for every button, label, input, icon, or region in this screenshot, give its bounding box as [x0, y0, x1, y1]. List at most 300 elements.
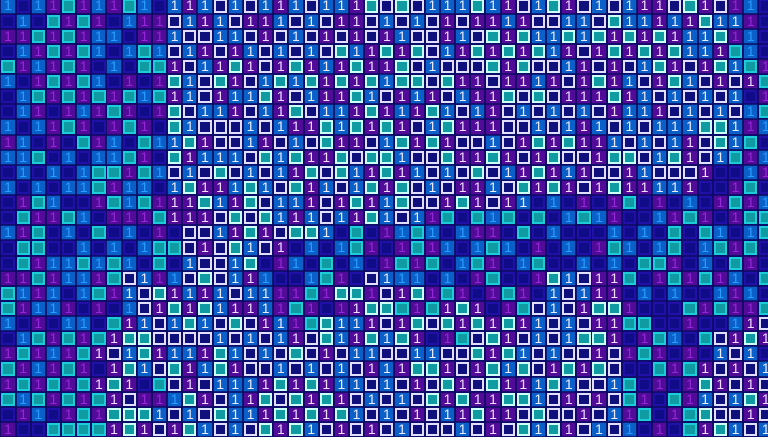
- binary digit grid: 1: [338, 209, 345, 225]
- binary digit grid: 1: [201, 179, 209, 195]
- binary digit grid: 1: [504, 194, 512, 210]
- binary digit grid: 1: [186, 43, 194, 59]
- binary digit grid: 1: [535, 330, 542, 346]
- binary digit grid: 1: [19, 13, 27, 29]
- binary digit grid: 1: [186, 13, 194, 29]
- binary digit grid: 1: [398, 43, 406, 59]
- binary digit grid: 1: [504, 58, 512, 74]
- binary digit grid: 1: [428, 285, 436, 301]
- binary digit grid: 1: [610, 224, 618, 240]
- binary digit grid: 1: [625, 179, 633, 195]
- binary digit grid: 1: [292, 315, 300, 331]
- binary digit grid: 1: [140, 421, 148, 437]
- binary digit grid: 1: [307, 118, 315, 134]
- binary digit grid: 1: [383, 134, 391, 150]
- binary digit grid: 1: [641, 13, 648, 29]
- binary digit grid: 1: [171, 315, 179, 331]
- binary digit grid: 1: [95, 345, 103, 361]
- binary digit grid: 1: [4, 28, 12, 44]
- binary digit grid: 1: [459, 376, 467, 392]
- binary digit grid: 1: [80, 285, 88, 301]
- binary digit grid: 1: [65, 270, 72, 286]
- binary digit grid: 1: [580, 134, 588, 150]
- binary digit grid: 1: [95, 73, 103, 89]
- binary digit grid: 1: [732, 391, 739, 407]
- binary digit grid: 1: [156, 406, 163, 422]
- binary digit grid: 1: [156, 28, 163, 44]
- binary digit grid: 1: [474, 118, 482, 134]
- binary digit grid: 1: [535, 73, 542, 89]
- binary digit grid: 1: [519, 134, 527, 150]
- binary digit grid: 1: [50, 134, 57, 150]
- binary digit grid: 1: [413, 13, 421, 29]
- binary digit grid: 1: [277, 103, 285, 119]
- binary digit grid: 1: [65, 179, 72, 195]
- binary digit grid: 1: [338, 58, 345, 74]
- binary digit grid: 1: [671, 406, 679, 422]
- binary digit grid: 1: [322, 149, 330, 165]
- binary digit grid: 1: [216, 194, 224, 210]
- binary digit grid: 1: [550, 134, 557, 150]
- binary digit grid: 1: [686, 28, 694, 44]
- binary digit grid: 1: [732, 421, 739, 437]
- binary digit grid: 1: [535, 179, 542, 195]
- binary digit grid: 1: [231, 376, 239, 392]
- binary digit grid: 1: [444, 43, 451, 59]
- binary digit grid: 1: [686, 43, 694, 59]
- binary digit grid: 1: [504, 13, 512, 29]
- binary digit grid: 1: [625, 421, 633, 437]
- binary digit grid: 1: [383, 255, 391, 271]
- binary digit grid: 1: [80, 209, 88, 225]
- binary digit grid: 1: [110, 58, 118, 74]
- binary digit grid: 1: [247, 391, 254, 407]
- binary digit grid: 1: [292, 285, 300, 301]
- binary digit grid: 1: [656, 209, 664, 225]
- binary digit grid: 1: [65, 376, 72, 392]
- binary digit grid: 1: [580, 285, 588, 301]
- binary digit grid: 1: [277, 285, 285, 301]
- binary digit grid: 1: [95, 149, 103, 165]
- binary digit grid: 1: [565, 179, 573, 195]
- binary digit grid: 1: [565, 88, 573, 104]
- binary digit grid: 1: [140, 209, 148, 225]
- binary digit grid: 1: [595, 345, 603, 361]
- binary digit grid: 1: [489, 209, 497, 225]
- binary digit grid: 1: [625, 406, 633, 422]
- binary digit grid: 1: [216, 103, 224, 119]
- binary digit grid: 1: [368, 164, 376, 180]
- binary digit grid: 1: [216, 330, 224, 346]
- binary digit grid: 1: [595, 285, 603, 301]
- binary digit grid: 1: [641, 224, 648, 240]
- binary digit grid: 1: [747, 285, 755, 301]
- binary digit grid: 1: [125, 13, 133, 29]
- binary digit grid: 1: [398, 270, 406, 286]
- binary digit grid: 1: [519, 285, 527, 301]
- binary digit grid: 1: [216, 376, 224, 392]
- binary digit grid: 1: [428, 345, 436, 361]
- binary digit grid: 1: [307, 209, 315, 225]
- binary digit grid: 1: [65, 300, 72, 316]
- binary digit grid: 1: [171, 421, 179, 437]
- binary digit grid: 1: [428, 88, 436, 104]
- binary digit grid: 1: [504, 73, 512, 89]
- binary digit grid: 1: [550, 224, 557, 240]
- binary digit grid: 1: [444, 239, 451, 255]
- binary digit grid: 1: [338, 194, 345, 210]
- binary digit grid: 1: [307, 300, 315, 316]
- binary digit grid: 1: [140, 270, 148, 286]
- binary digit grid: 1: [262, 406, 270, 422]
- binary digit grid: 1: [247, 43, 254, 59]
- binary digit grid: 1: [383, 103, 391, 119]
- binary digit grid: 1: [444, 194, 451, 210]
- binary digit grid: 1: [671, 134, 679, 150]
- binary digit grid: 1: [171, 209, 179, 225]
- binary digit grid: 1: [413, 255, 421, 271]
- binary digit grid: 1: [95, 270, 103, 286]
- binary digit grid: 1: [550, 285, 557, 301]
- binary digit grid: 1: [747, 28, 755, 44]
- binary digit grid: 1: [732, 209, 739, 225]
- binary digit grid: 1: [307, 421, 315, 437]
- binary digit grid: 1: [656, 270, 664, 286]
- binary digit grid: 1: [368, 285, 376, 301]
- binary digit grid: 1: [231, 391, 239, 407]
- binary digit grid: 1: [580, 255, 588, 271]
- binary digit grid: 1: [732, 118, 739, 134]
- binary digit grid: 1: [231, 270, 239, 286]
- binary digit grid: 1: [641, 391, 648, 407]
- binary digit grid: 1: [625, 73, 633, 89]
- binary digit grid: 1: [383, 28, 391, 44]
- binary digit grid: 1: [656, 345, 664, 361]
- binary digit grid: 1: [459, 255, 467, 271]
- binary digit grid: 1: [171, 134, 179, 150]
- binary digit grid: 1: [247, 330, 254, 346]
- binary digit grid: 1: [398, 315, 406, 331]
- binary digit grid: 1: [4, 270, 12, 286]
- binary digit grid: 1: [368, 43, 376, 59]
- binary digit grid: 1: [140, 239, 148, 255]
- binary digit grid: 1: [231, 300, 239, 316]
- binary digit grid: 1: [368, 194, 376, 210]
- binary digit grid: 1: [19, 224, 27, 240]
- binary digit grid: 1: [732, 300, 739, 316]
- binary digit grid: 1: [262, 285, 270, 301]
- binary digit grid: 1: [595, 209, 603, 225]
- binary digit grid: 1: [34, 179, 42, 195]
- binary digit grid: 1: [595, 315, 603, 331]
- binary digit grid: 1: [247, 134, 254, 150]
- binary digit grid: 1: [474, 103, 482, 119]
- binary digit grid: 1: [353, 73, 360, 89]
- binary digit grid: 1: [459, 421, 467, 437]
- binary digit grid: 1: [322, 285, 330, 301]
- binary digit grid: 1: [231, 149, 239, 165]
- binary digit grid: 1: [550, 28, 557, 44]
- binary digit grid: 1: [4, 376, 12, 392]
- binary digit grid: 1: [322, 73, 330, 89]
- binary digit grid: 1: [747, 103, 755, 119]
- binary digit grid: 1: [353, 179, 360, 195]
- binary digit grid: 1: [716, 43, 724, 59]
- binary digit grid: 1: [474, 300, 482, 316]
- binary digit grid: 1: [641, 103, 648, 119]
- binary digit grid: 1: [50, 330, 57, 346]
- binary digit grid: 1: [338, 376, 345, 392]
- binary digit grid: 1: [216, 179, 224, 195]
- binary digit grid: 1: [277, 164, 285, 180]
- binary digit grid: 1: [110, 330, 118, 346]
- binary digit grid: 1: [156, 224, 163, 240]
- binary digit grid: 1: [277, 118, 285, 134]
- binary digit grid: 1: [34, 209, 42, 225]
- binary digit grid: 1: [747, 73, 755, 89]
- binary digit grid: 1: [322, 406, 330, 422]
- binary digit grid: 1: [716, 345, 724, 361]
- binary digit grid: 1: [489, 134, 497, 150]
- binary digit grid: 1: [110, 179, 118, 195]
- binary digit grid: 1: [19, 164, 27, 180]
- binary digit grid: 1: [413, 376, 421, 392]
- binary digit grid: 1: [247, 239, 254, 255]
- binary digit grid: 1: [519, 73, 527, 89]
- binary digit grid: 1: [231, 194, 239, 210]
- binary digit grid: 1: [19, 391, 27, 407]
- binary digit grid: 1: [610, 330, 618, 346]
- binary digit grid: 1: [65, 224, 72, 240]
- binary digit grid: 1: [125, 224, 133, 240]
- binary digit grid: 1: [34, 300, 42, 316]
- binary digit grid: 1: [322, 28, 330, 44]
- binary digit grid: 1: [565, 13, 573, 29]
- binary digit grid: 1: [65, 255, 72, 271]
- binary digit grid: 1: [277, 300, 285, 316]
- binary digit grid: 1: [95, 406, 103, 422]
- binary digit grid: 1: [444, 360, 451, 376]
- binary digit grid: 1: [95, 28, 103, 44]
- binary digit grid: 1: [186, 194, 194, 210]
- binary digit grid: 1: [277, 255, 285, 271]
- binary digit grid: 1: [353, 209, 360, 225]
- binary digit grid: 1: [231, 43, 239, 59]
- binary digit grid: 1: [535, 421, 542, 437]
- binary digit grid: 1: [231, 421, 239, 437]
- binary digit grid: 1: [656, 118, 664, 134]
- binary digit grid: 1: [489, 345, 497, 361]
- binary digit grid: 1: [80, 58, 88, 74]
- binary digit grid: 1: [656, 179, 664, 195]
- binary digit grid: 1: [186, 300, 194, 316]
- binary digit grid: 1: [50, 209, 57, 225]
- binary digit grid: 1: [125, 300, 133, 316]
- binary digit grid: 1: [428, 224, 436, 240]
- binary digit grid: 1: [292, 134, 300, 150]
- binary digit grid: 1: [34, 118, 42, 134]
- binary digit grid: 1: [247, 270, 254, 286]
- binary digit grid: 1: [50, 391, 57, 407]
- binary digit grid: 1: [262, 224, 270, 240]
- binary digit grid: 1: [444, 270, 451, 286]
- binary digit grid: 1: [171, 194, 179, 210]
- binary digit grid: 1: [216, 58, 224, 74]
- binary digit grid: 1: [732, 28, 739, 44]
- binary digit grid: 1: [459, 43, 467, 59]
- binary digit grid: 1: [595, 134, 603, 150]
- binary digit grid: 1: [277, 194, 285, 210]
- binary digit grid: 1: [474, 179, 482, 195]
- binary digit grid: 1: [95, 300, 103, 316]
- binary digit grid: 1: [701, 255, 709, 271]
- binary digit grid: 1: [50, 270, 57, 286]
- binary digit grid: 1: [80, 360, 88, 376]
- binary digit grid: 1: [519, 345, 527, 361]
- binary digit grid: 1: [95, 103, 103, 119]
- binary digit grid: 1: [353, 134, 360, 150]
- binary digit grid: 1: [732, 58, 739, 74]
- binary digit grid: 1: [489, 421, 497, 437]
- binary digit grid: 1: [171, 391, 179, 407]
- binary digit grid: 1: [474, 391, 482, 407]
- binary digit grid: 1: [701, 209, 709, 225]
- binary digit grid: 1: [156, 164, 163, 180]
- binary digit grid: 1: [262, 300, 270, 316]
- binary digit grid: 1: [186, 376, 194, 392]
- binary digit grid: 1: [19, 360, 27, 376]
- binary digit grid: 1: [595, 88, 603, 104]
- binary digit grid: 1: [171, 285, 179, 301]
- binary digit grid: 1: [353, 300, 360, 316]
- binary digit grid: 1: [383, 194, 391, 210]
- binary digit grid: 1: [322, 88, 330, 104]
- binary digit grid: 1: [338, 315, 345, 331]
- binary digit grid: 1: [474, 194, 482, 210]
- binary digit grid: 1: [368, 345, 376, 361]
- binary digit grid: 1: [474, 360, 482, 376]
- binary digit grid: 1: [80, 391, 88, 407]
- binary digit grid: 1: [701, 58, 709, 74]
- binary digit grid: 1: [565, 209, 573, 225]
- binary digit grid: 1: [474, 239, 482, 255]
- binary digit grid: 1: [398, 239, 406, 255]
- binary digit grid: 1: [4, 345, 12, 361]
- binary digit grid: 1: [19, 43, 27, 59]
- binary digit grid: 1: [747, 300, 755, 316]
- binary digit grid: 1: [625, 88, 633, 104]
- binary digit grid: 1: [50, 58, 57, 74]
- binary digit grid: 1: [292, 194, 300, 210]
- binary digit grid: 1: [201, 421, 209, 437]
- binary digit grid: 1: [34, 345, 42, 361]
- binary digit grid: 1: [535, 270, 542, 286]
- binary digit grid: 1: [747, 406, 755, 422]
- binary digit grid: 1: [686, 376, 694, 392]
- binary digit grid: 1: [444, 13, 451, 29]
- binary digit grid: 1: [398, 421, 406, 437]
- binary digit grid: 1: [610, 255, 618, 271]
- binary digit grid: 1: [656, 421, 664, 437]
- binary digit grid: 1: [34, 103, 42, 119]
- binary digit grid: 1: [50, 88, 57, 104]
- binary digit grid: 1: [489, 179, 497, 195]
- binary digit grid: 1: [19, 406, 27, 422]
- binary digit grid: 1: [201, 285, 209, 301]
- binary digit grid: 1: [535, 118, 542, 134]
- binary digit grid: 1: [550, 300, 557, 316]
- binary digit grid: 1: [110, 134, 118, 150]
- binary digit grid: 1: [459, 88, 467, 104]
- binary digit grid: 1: [201, 58, 209, 74]
- binary digit grid: 1: [732, 330, 739, 346]
- binary digit grid: 1: [140, 149, 148, 165]
- binary digit grid: 1: [338, 103, 345, 119]
- binary digit grid: 1: [398, 118, 406, 134]
- binary digit grid: 1: [686, 134, 694, 150]
- binary digit grid: 1: [732, 179, 739, 195]
- binary digit grid: 1: [201, 149, 209, 165]
- binary digit grid: 1: [656, 73, 664, 89]
- binary digit grid: 1: [504, 164, 512, 180]
- binary digit grid: 1: [186, 88, 194, 104]
- binary digit grid: 1: [413, 103, 421, 119]
- binary digit grid: 1: [565, 330, 573, 346]
- binary digit grid: 1: [383, 13, 391, 29]
- binary digit grid: 1: [519, 103, 527, 119]
- binary digit grid: 1: [353, 255, 360, 271]
- binary digit grid: 1: [489, 406, 497, 422]
- binary digit grid: 1: [641, 285, 648, 301]
- binary digit grid: 1: [277, 421, 285, 437]
- binary digit grid: 1: [34, 360, 42, 376]
- binary digit grid: 1: [459, 149, 467, 165]
- binary digit grid: 1: [50, 118, 57, 134]
- binary digit grid: 1: [80, 103, 88, 119]
- binary digit grid: 1: [125, 209, 133, 225]
- binary digit grid: 1: [247, 118, 254, 134]
- binary digit grid: 1: [368, 315, 376, 331]
- binary digit grid: 1: [216, 28, 224, 44]
- binary digit grid: 1: [641, 58, 648, 74]
- binary digit grid: 1: [171, 28, 179, 44]
- binary digit grid: 1: [504, 406, 512, 422]
- binary digit grid: 1: [489, 224, 497, 240]
- binary digit grid: 1: [671, 285, 679, 301]
- binary digit grid: 1: [489, 255, 497, 271]
- binary digit grid: 1: [262, 345, 270, 361]
- binary digit grid: 1: [156, 391, 163, 407]
- binary digit grid: 1: [19, 134, 27, 150]
- binary digit grid: 1: [413, 330, 421, 346]
- binary digit grid: 1: [489, 88, 497, 104]
- binary digit grid: 1: [277, 149, 285, 165]
- binary digit grid: 1: [716, 13, 724, 29]
- binary digit grid: 1: [80, 179, 88, 195]
- binary digit grid: 1: [4, 179, 12, 195]
- binary digit grid: 1: [671, 179, 679, 195]
- binary digit grid: 1: [671, 13, 679, 29]
- binary digit grid: 1: [277, 330, 285, 346]
- binary digit grid: 1: [383, 73, 391, 89]
- binary digit grid: 1: [474, 224, 482, 240]
- binary digit grid: 1: [125, 315, 133, 331]
- binary digit grid: 1: [535, 391, 542, 407]
- binary digit grid: 1: [732, 13, 739, 29]
- binary digit grid: 1: [641, 28, 648, 44]
- binary digit grid: 1: [338, 330, 345, 346]
- binary digit grid: 1: [671, 255, 679, 271]
